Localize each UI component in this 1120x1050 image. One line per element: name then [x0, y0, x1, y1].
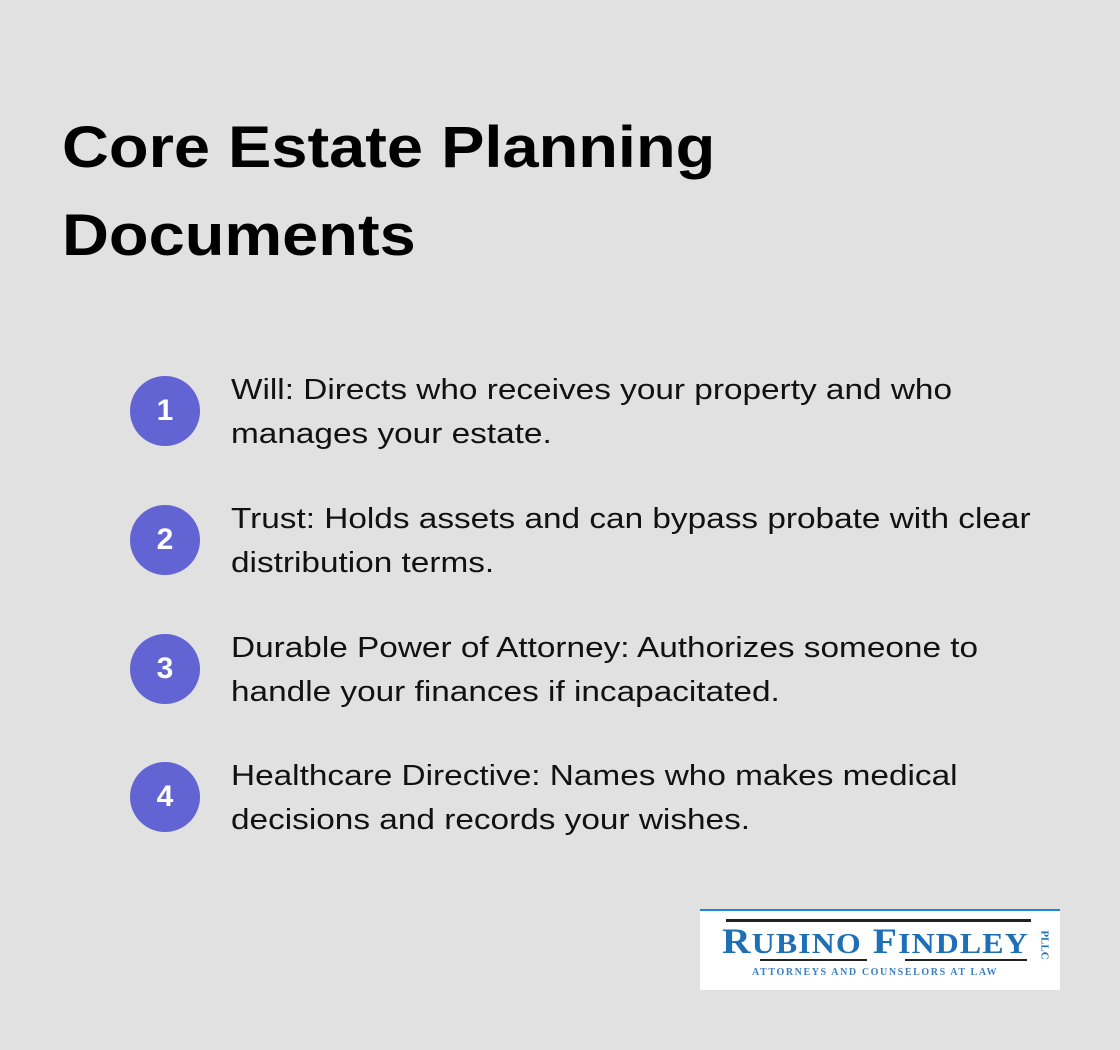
text 3: [231, 632, 978, 708]
text 4: Healthcare Directive: Names who makes medical: [231, 760, 958, 792]
badge 3: [130, 634, 200, 704]
title: Core Estate Planning: [62, 115, 715, 180]
badge 3: 3: [157, 652, 173, 685]
text 1: Will: Directs who receives your property and who: [231, 374, 952, 406]
badge 1: 1: [157, 394, 173, 427]
text 1: manages your estate.: [231, 418, 552, 450]
text 3: handle your finances if incapacitated.: [231, 676, 780, 708]
text 2: [231, 503, 1031, 579]
badge 4: 4: [157, 780, 173, 813]
badge 2: [130, 505, 200, 575]
logo: PLLC: [1039, 930, 1051, 960]
logo: [700, 909, 1060, 990]
badge 2: 2: [157, 523, 173, 556]
logo: RUBINO FINDLEY: [722, 921, 1029, 961]
item 1: [130, 374, 952, 450]
text 2: Trust: Holds assets and can bypass probate with clear: [231, 503, 1031, 535]
text 4: [231, 760, 958, 836]
item 2: [130, 503, 1031, 579]
text 2: distribution terms.: [231, 547, 494, 579]
text 4: decisions and records your wishes.: [231, 804, 750, 836]
title: Documents: [62, 203, 416, 268]
title: [62, 115, 715, 268]
item 3: [130, 632, 978, 708]
badge 4: [130, 762, 200, 832]
text 3: Durable Power of Attorney: Authorizes someone to: [231, 632, 978, 664]
item 4: [130, 760, 958, 836]
badge 1: [130, 376, 200, 446]
text 1: [231, 374, 952, 450]
logo: ATTORNEYS AND COUNSELORS AT LAW: [752, 967, 998, 978]
